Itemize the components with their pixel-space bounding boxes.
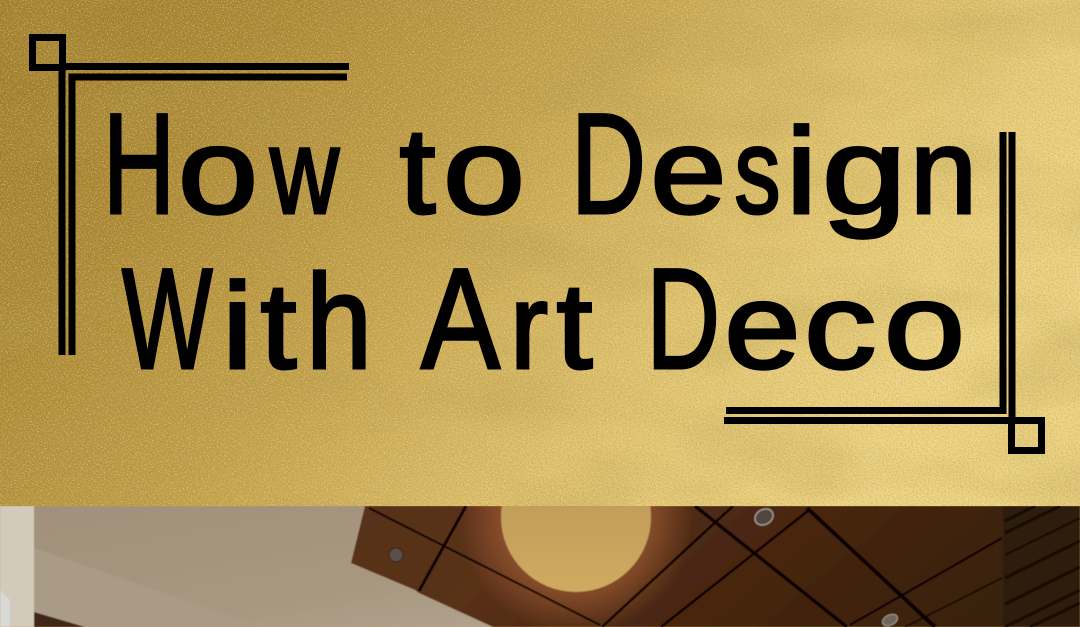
title line 2: A bbox=[421, 240, 501, 399]
top-left art deco corner frame bbox=[32, 38, 349, 355]
title line 2: i bbox=[222, 258, 253, 394]
title line 1: t bbox=[400, 103, 436, 239]
title line 1: D bbox=[571, 85, 646, 244]
black panel seams bbox=[369, 506, 1002, 627]
wall and soffit bbox=[0, 506, 494, 627]
title line 1: H bbox=[103, 85, 175, 244]
title line 2: h bbox=[306, 248, 372, 397]
recessed ceiling spotlights bbox=[389, 506, 899, 627]
title line 2: e bbox=[724, 258, 800, 394]
title line 2: r bbox=[510, 258, 548, 394]
title line 1: e bbox=[650, 103, 726, 239]
pendant light disc bbox=[501, 442, 651, 592]
title line 1: o bbox=[178, 103, 258, 239]
title bbox=[103, 85, 977, 399]
title line 1: o bbox=[443, 103, 525, 239]
title line 2: o bbox=[884, 258, 965, 394]
title line 2: t bbox=[260, 258, 296, 394]
interior photo: art deco ceiling bbox=[0, 506, 1080, 627]
title line 2: D bbox=[646, 240, 720, 399]
title line 1: w bbox=[269, 103, 340, 239]
wood ceiling panels bbox=[350, 506, 1004, 627]
bottom-right art deco corner frame bbox=[724, 132, 1042, 450]
copper glow around pendant bbox=[459, 506, 688, 626]
title line 1: g bbox=[822, 103, 906, 239]
title line 1: i bbox=[786, 103, 817, 239]
title line 1: n bbox=[910, 103, 977, 239]
title line 2: c bbox=[804, 258, 876, 394]
title line 2: W bbox=[122, 240, 213, 399]
wood slat wall bbox=[1003, 506, 1080, 627]
title line 2: t bbox=[556, 258, 592, 394]
title line 1: s bbox=[734, 103, 780, 239]
